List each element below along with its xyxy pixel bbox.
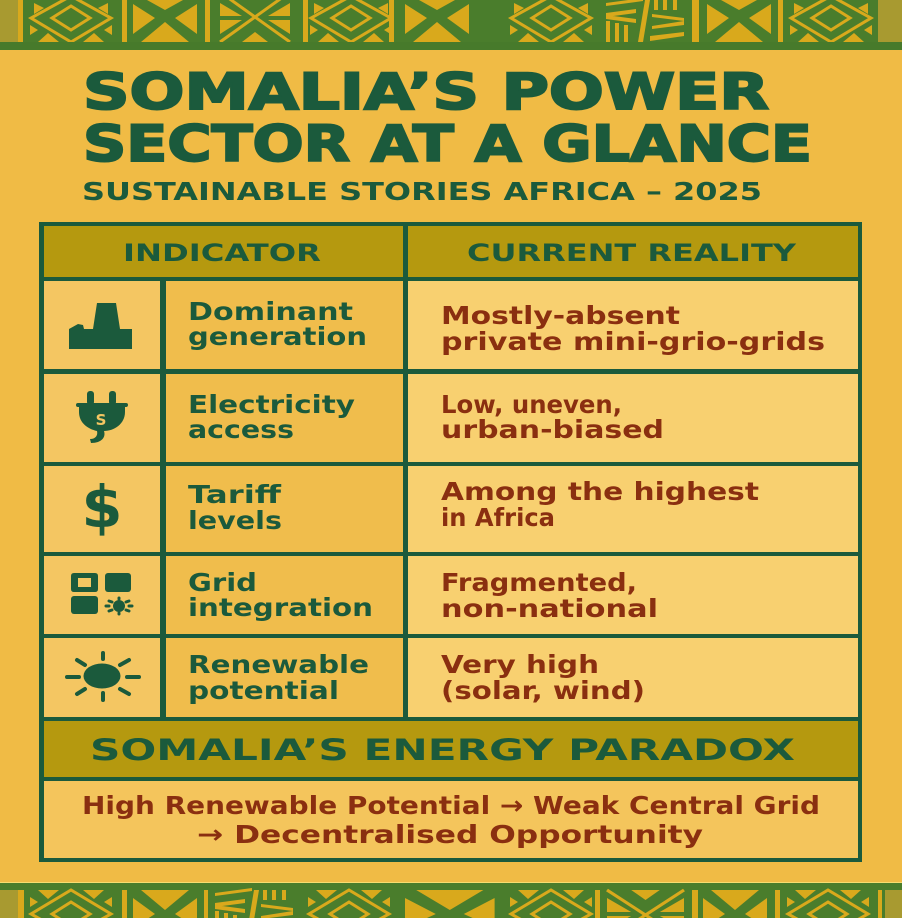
label: grid integration: integration xyxy=(188,593,373,622)
value: electricity access: Low, uneven, xyxy=(441,390,622,419)
label: dominant generation: Dominant xyxy=(188,297,353,326)
value: renewable potential xyxy=(441,650,645,705)
title xyxy=(83,63,812,173)
value: grid integration: non-national xyxy=(441,594,658,623)
label: tariff levels: Tariff xyxy=(188,480,282,509)
icon: sun xyxy=(67,653,139,700)
table xyxy=(39,222,862,862)
value: renewable potential: Very high xyxy=(441,650,599,679)
title: SOMALIA’S POWER xyxy=(83,63,769,121)
icon: plug with dollar xyxy=(76,391,128,443)
paradox heading: SOMALIA’S ENERGY PARADOX xyxy=(90,733,795,767)
value: dominant generation: Mostly-absent xyxy=(441,301,680,330)
value: grid integration xyxy=(441,568,658,623)
paradox statement xyxy=(82,791,820,849)
value: grid integration: Fragmented, xyxy=(441,568,637,597)
label: renewable potential: Renewable xyxy=(188,650,369,679)
value: tariff levels: in Africa xyxy=(441,503,555,532)
top patterned border xyxy=(0,0,902,50)
value: dominant generation xyxy=(441,301,825,356)
table frame and cell fills xyxy=(39,222,862,862)
label: dominant generation xyxy=(188,297,367,351)
bottom patterned border xyxy=(0,882,902,918)
subtitle: SUSTAINABLE STORIES AFRICA – 2025 xyxy=(82,177,762,206)
value: renewable potential: (solar, wind) xyxy=(441,676,645,705)
label: electricity access xyxy=(188,390,355,444)
label: renewable potential xyxy=(188,650,369,705)
paradox statement: High Renewable Potential → Weak Central Grid xyxy=(82,791,820,820)
paradox statement: → Decentralised Opportunity xyxy=(197,820,703,849)
label: dominant generation: generation xyxy=(188,322,367,351)
header: current reality: CURRENT REALITY xyxy=(467,239,797,267)
icon: dollar sign: $ xyxy=(82,473,122,541)
label: grid integration xyxy=(188,568,373,622)
value: electricity access xyxy=(441,390,664,444)
label: electricity access: Electricity xyxy=(188,390,355,419)
value: tariff levels: Among the highest xyxy=(441,477,759,506)
header: indicator: INDICATOR xyxy=(123,239,321,267)
label: electricity access: access xyxy=(188,415,294,444)
value: tariff levels xyxy=(441,477,759,532)
label: tariff levels: levels xyxy=(188,506,282,535)
title: SECTOR AT A GLANCE xyxy=(83,115,812,173)
icon: plug with dollar: S xyxy=(96,411,106,429)
value: electricity access: urban-biased xyxy=(441,415,664,444)
icon: grid blocks xyxy=(71,573,132,614)
label: renewable potential: potential xyxy=(188,676,339,705)
value: dominant generation: private mini-grio-grids xyxy=(441,327,825,356)
label: grid integration: Grid xyxy=(188,568,257,597)
label: tariff levels xyxy=(188,480,282,535)
icon: power plant xyxy=(69,303,132,349)
